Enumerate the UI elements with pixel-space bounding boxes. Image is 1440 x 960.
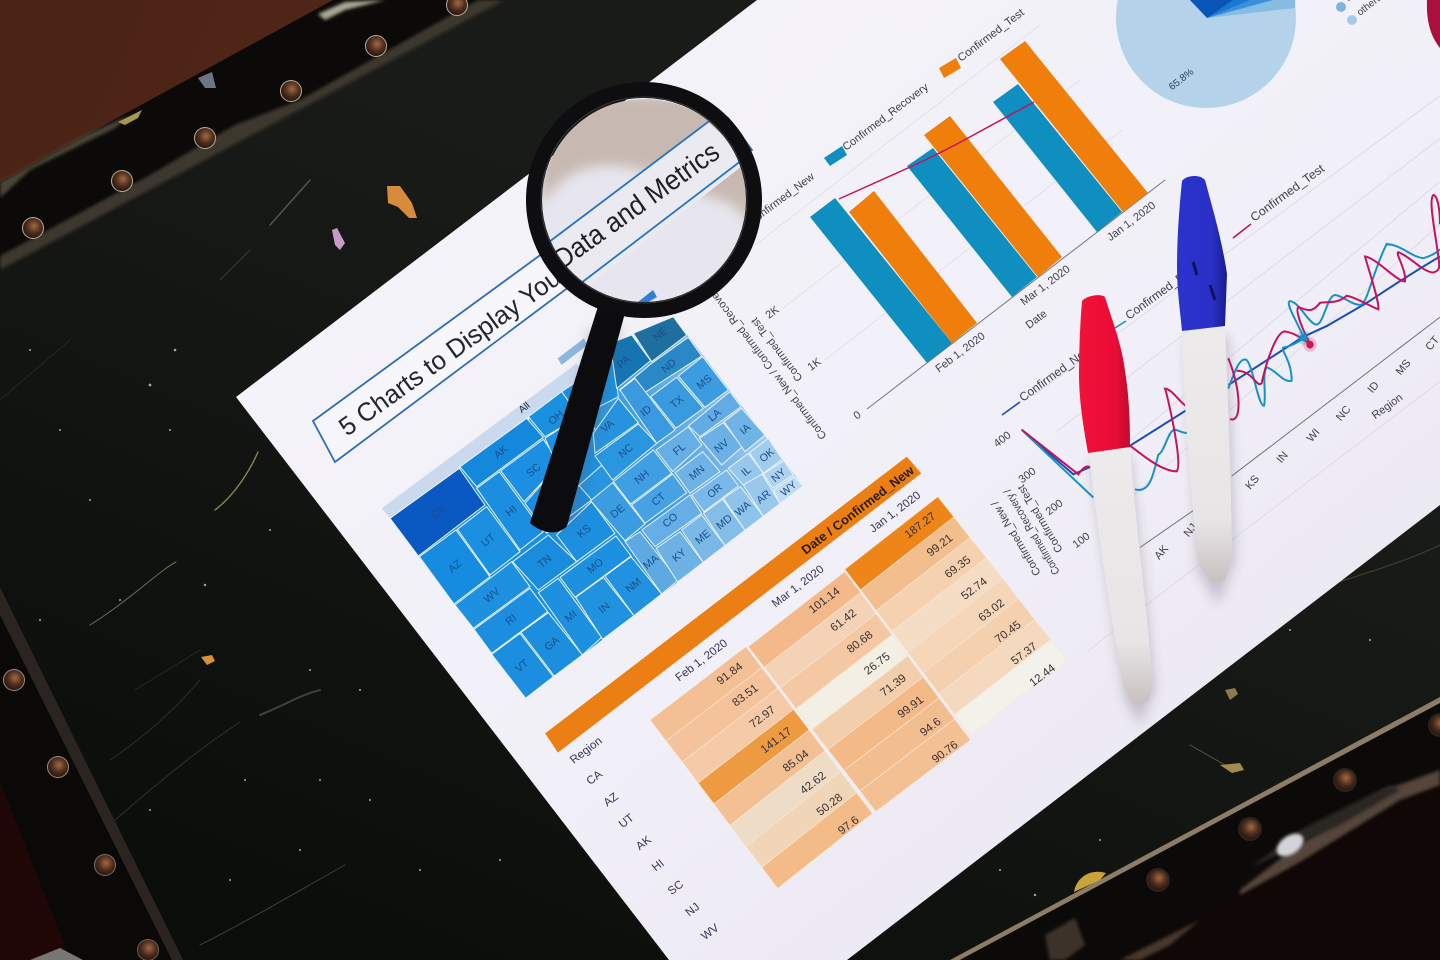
- table values: 12.44: [1027, 662, 1059, 689]
- treemap state labels: ID: [638, 403, 654, 419]
- line chart y-axis titles: Confirmed_Recovery /: [1001, 486, 1063, 577]
- treemap state labels: MA: [641, 552, 662, 572]
- treemap state labels: VA: [599, 417, 617, 435]
- treemap state labels: FL: [671, 441, 688, 458]
- rivet: [1333, 768, 1357, 792]
- line chart axis labels: ID: [1366, 379, 1382, 396]
- table region labels: AK: [634, 834, 654, 853]
- bar chart axis labels: [764, 200, 1158, 422]
- treemap state labels: UT: [479, 531, 498, 550]
- treemap state labels: NC: [616, 441, 636, 461]
- treemap state labels: NV: [712, 436, 732, 456]
- background: dark lower left corner: [0, 783, 70, 960]
- paint chip: pink: [332, 228, 345, 250]
- treemap state labels: AK: [492, 443, 510, 461]
- treemap state labels: ND: [659, 356, 679, 376]
- bar chart axis: [867, 180, 1165, 409]
- table region labels: NJ: [683, 901, 702, 919]
- bar chart axis labels: 0: [851, 409, 864, 422]
- table values: 141.17: [759, 725, 794, 756]
- table region labels: UT: [617, 812, 637, 831]
- treemap state labels: SC: [524, 461, 544, 480]
- rivet: [280, 80, 302, 102]
- table values: 91.84: [715, 660, 746, 688]
- line chart axis labels: [992, 334, 1440, 562]
- table region labels: HI: [650, 858, 667, 874]
- paint chip: gold: [1220, 763, 1244, 773]
- magnified title text: Data and Metrics: [547, 136, 725, 275]
- table values: 52.74: [959, 575, 990, 603]
- icon: blue marker: [1177, 176, 1232, 583]
- red marker cap at edge: [1427, 0, 1440, 48]
- rivet: [446, 0, 468, 16]
- table values: 97.6: [836, 814, 862, 837]
- panel: treemap: [382, 317, 803, 698]
- treemap state labels: NH: [632, 468, 652, 487]
- pie percentage label: 65.8%: [1167, 67, 1196, 93]
- treemap state labels: MI: [563, 608, 580, 625]
- treemap state labels: GA: [542, 634, 563, 653]
- table region labels: CA: [585, 768, 605, 788]
- treemap state labels: NY: [769, 466, 788, 485]
- table header bar: [545, 457, 921, 753]
- table header text: Date / Confirmed_New: [798, 462, 918, 557]
- treemap state labels: WV: [482, 585, 503, 606]
- bar chart legend: Confirmed_Test: [956, 7, 1027, 64]
- column: Jan 1, 2020: [845, 497, 1067, 735]
- rivet: [194, 127, 216, 149]
- panel: pie chart: [1116, 0, 1384, 108]
- treemap state labels: DE: [608, 502, 627, 521]
- treemap state labels: CA: [429, 502, 449, 522]
- treemap state labels: IN: [597, 600, 612, 616]
- treemap state labels: MD: [714, 512, 735, 532]
- panel: title box: [313, 118, 752, 462]
- top strap with rivets: [0, 0, 505, 270]
- treemap state labels: IA: [738, 421, 754, 437]
- ring highlight: [541, 97, 747, 303]
- paint chip: small orange: [201, 655, 215, 665]
- line chart axis labels: 400: [992, 429, 1013, 450]
- bar chart axis labels: Mar 1, 2020: [1018, 263, 1073, 308]
- treemap state labels: NM: [624, 576, 644, 595]
- title text: 5 Charts to Display You: [333, 262, 566, 442]
- treemap state labels: TN: [536, 552, 554, 571]
- line chart legend: Confirmed_Recovery: [1123, 245, 1222, 322]
- white scuff: [1273, 829, 1307, 861]
- table values: 101.14: [807, 585, 843, 616]
- rivet: [111, 170, 133, 192]
- treemap state labels: VT: [513, 657, 532, 675]
- table column headers: Jan 1, 2020: [868, 490, 923, 535]
- header label: All: All: [517, 400, 532, 416]
- treemap state labels: LA: [706, 406, 724, 424]
- bar chart y-axis titles: Confirmed_New / Confirmed_Recovery: [703, 282, 829, 441]
- pie legend: [1336, 0, 1384, 25]
- series: Confirmed_Recovery: [1023, 244, 1440, 497]
- bar chart axis labels: 2K: [764, 303, 782, 322]
- treemap state labels: CO: [660, 511, 680, 530]
- line chart axis labels: 200: [1044, 497, 1065, 518]
- table values: [715, 510, 1059, 837]
- pie wedges: [1190, 0, 1296, 18]
- icon: magnifying glass: [530, 90, 755, 532]
- highlight dot: recovery: [1297, 330, 1310, 345]
- line chart axis labels: KS: [1243, 473, 1262, 492]
- icon: red marker: [1079, 295, 1152, 705]
- panel: bar chart: [703, 7, 1165, 441]
- rivet: [1428, 713, 1440, 737]
- treemap state labels: IL: [739, 464, 754, 479]
- column: Mar 1, 2020: [748, 572, 970, 812]
- left strap with rivets: [0, 587, 183, 960]
- treemap state labels: MS: [694, 372, 714, 392]
- treemap state labels: PA: [615, 353, 633, 371]
- bars: Jan 1, 2020: [993, 41, 1148, 232]
- table values: 63.02: [977, 597, 1007, 624]
- handle: [530, 300, 628, 532]
- treemap state labels: TX: [668, 393, 686, 411]
- line chart y-axis titles: Confirmed_Test: [1016, 482, 1066, 555]
- treemap state labels: OK: [757, 446, 777, 465]
- paint chip: tan: [1225, 688, 1238, 700]
- bar chart axis labels: Jan 1, 2020: [1105, 200, 1158, 244]
- magnifier shadow: [550, 325, 620, 530]
- table column headers: Feb 1, 2020: [673, 638, 730, 684]
- treemap state labels: [429, 325, 799, 675]
- bar chart axis labels: Date: [1024, 308, 1049, 331]
- rivet: [94, 854, 116, 876]
- lens ring: [534, 90, 754, 310]
- table values: 72.97: [747, 704, 778, 731]
- table values: 187.27: [903, 510, 938, 541]
- table values: 71.39: [878, 672, 909, 699]
- treemap base: [390, 317, 803, 698]
- bar chart y-axis titles: Confirmed_Test: [749, 315, 805, 383]
- table values: 99.21: [925, 532, 955, 559]
- table values: 61.42: [828, 607, 859, 634]
- bar chart legend: [733, 7, 1027, 235]
- treemap state labels: RI: [503, 612, 519, 628]
- treemap state labels: HI: [504, 503, 519, 519]
- highlight dot: test: [1303, 337, 1317, 352]
- line chart x axis: [1140, 317, 1440, 547]
- line chart axis labels: 300: [1017, 465, 1038, 486]
- panel: heat table: [545, 457, 1067, 943]
- table values: 42.62: [798, 770, 829, 797]
- table values: 70.45: [993, 619, 1024, 646]
- table values: 69.35: [943, 554, 973, 581]
- line chart legend: Confirmed_Test: [1248, 161, 1328, 224]
- treemap state labels: KY: [670, 546, 689, 565]
- table values: 80.68: [845, 629, 876, 656]
- table values: 83.51: [730, 682, 761, 709]
- line chart axis labels: 100: [1071, 530, 1092, 551]
- bar chart legend: Confirmed_Recovery: [841, 81, 931, 153]
- marker shadows: [1090, 335, 1235, 725]
- gold mesh sticker: [1074, 872, 1106, 892]
- treemap state labels: AZ: [446, 557, 465, 576]
- treemap state labels: CT: [649, 490, 668, 509]
- treemap state labels: NE: [651, 325, 670, 344]
- line chart axis labels: NC: [1334, 404, 1353, 423]
- rivet: [1238, 817, 1262, 841]
- series: Confirmed_New: [1022, 256, 1440, 474]
- treemap state labels: ME: [693, 527, 713, 547]
- table region labels: WV: [699, 922, 722, 943]
- line chart axis labels: MS: [1394, 357, 1414, 378]
- table column headers: Region: [568, 735, 605, 766]
- column: Feb 1, 2020: [650, 647, 872, 888]
- bars: Mar 1, 2020: [907, 116, 1062, 297]
- line chart y-axis titles: Confirmed_New /: [989, 498, 1044, 578]
- rivet: [3, 669, 25, 691]
- treemap state labels: WY: [778, 479, 799, 499]
- bar chart axis labels: 1K: [806, 355, 824, 374]
- lower right strap with rivets: [950, 697, 1440, 960]
- treemap state labels: MN: [687, 463, 707, 483]
- table region labels: SC: [666, 879, 686, 898]
- bar chart axis labels: Feb 1, 2020: [933, 330, 988, 375]
- table region labels: [585, 768, 722, 943]
- rivet: [22, 217, 44, 239]
- line chart axis labels: Region: [1370, 392, 1405, 422]
- line chart legend: [1002, 161, 1328, 415]
- magnified title lines: [550, 120, 740, 282]
- treemap state labels: OR: [705, 481, 725, 501]
- table values: 26.75: [862, 651, 893, 678]
- trend line: [839, 102, 1034, 199]
- rivet: [137, 939, 159, 960]
- line chart axis labels: NJ: [1182, 522, 1200, 540]
- treemap state labels: OH: [546, 408, 566, 428]
- table values: 85.04: [781, 748, 812, 775]
- treemap state labels: MO: [585, 556, 606, 576]
- bars: Feb 1, 2020: [810, 191, 977, 363]
- table column headers: Mar 1, 2020: [770, 564, 827, 610]
- line chart axis labels: IN: [1275, 449, 1291, 466]
- line chart axis labels: AK: [1152, 543, 1171, 562]
- table values: 57.37: [1009, 641, 1040, 668]
- table values: 90.76: [930, 739, 961, 766]
- bar chart legend: Confirmed_New: [747, 171, 817, 228]
- treemap state labels: WA: [733, 498, 754, 519]
- table values: 50.28: [815, 792, 845, 819]
- table region labels: AZ: [602, 791, 621, 809]
- background: dark lower right corner: [1117, 783, 1440, 960]
- table values: 94.6: [918, 716, 944, 739]
- treemap header accent: [558, 338, 587, 365]
- line chart legend: Confirmed_New: [1017, 342, 1095, 404]
- table values: 99.91: [896, 694, 926, 721]
- treemap cells: [390, 317, 803, 698]
- line chart axis labels: WI: [1305, 427, 1323, 445]
- rivet: [1146, 868, 1170, 892]
- treemap state labels: AR: [754, 488, 774, 507]
- table column headers: [568, 490, 923, 766]
- treemap header strip: [382, 363, 585, 518]
- paint chip: orange: [387, 186, 417, 218]
- rivet: [365, 35, 387, 57]
- treemap state labels: KS: [575, 522, 594, 541]
- panel: line chart: [1022, 96, 1440, 651]
- lens glass: [542, 99, 746, 302]
- rivet: [47, 756, 69, 778]
- series: Confirmed_Test: [1022, 195, 1440, 474]
